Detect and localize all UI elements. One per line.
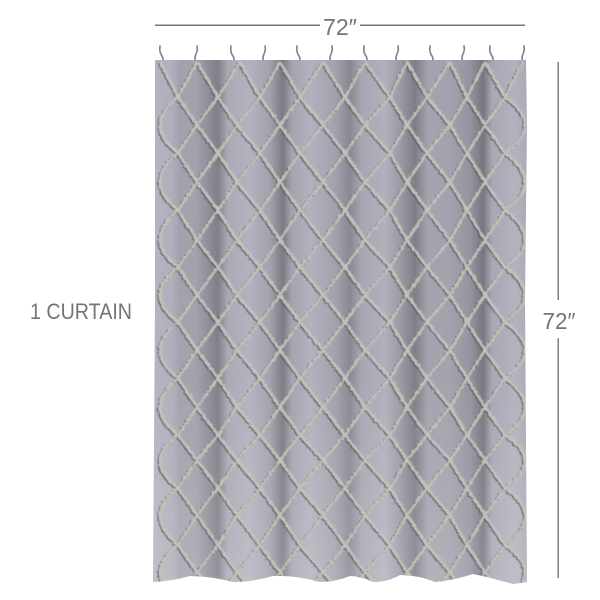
curtain panel with lattice pattern [150,58,532,600]
side label: 1 curtain: 1 CURTAIN [30,299,132,324]
lattice shadow stitching [158,63,524,600]
lightening toward the hem [153,420,527,584]
lattice chenille trellis [160,62,525,600]
fabric with vertical folds [150,58,532,588]
top width dimension: 72 inches: 72″ [323,14,357,40]
curtain hooks [160,46,524,62]
right height dimension: 72 inches: 72″ [542,308,576,334]
